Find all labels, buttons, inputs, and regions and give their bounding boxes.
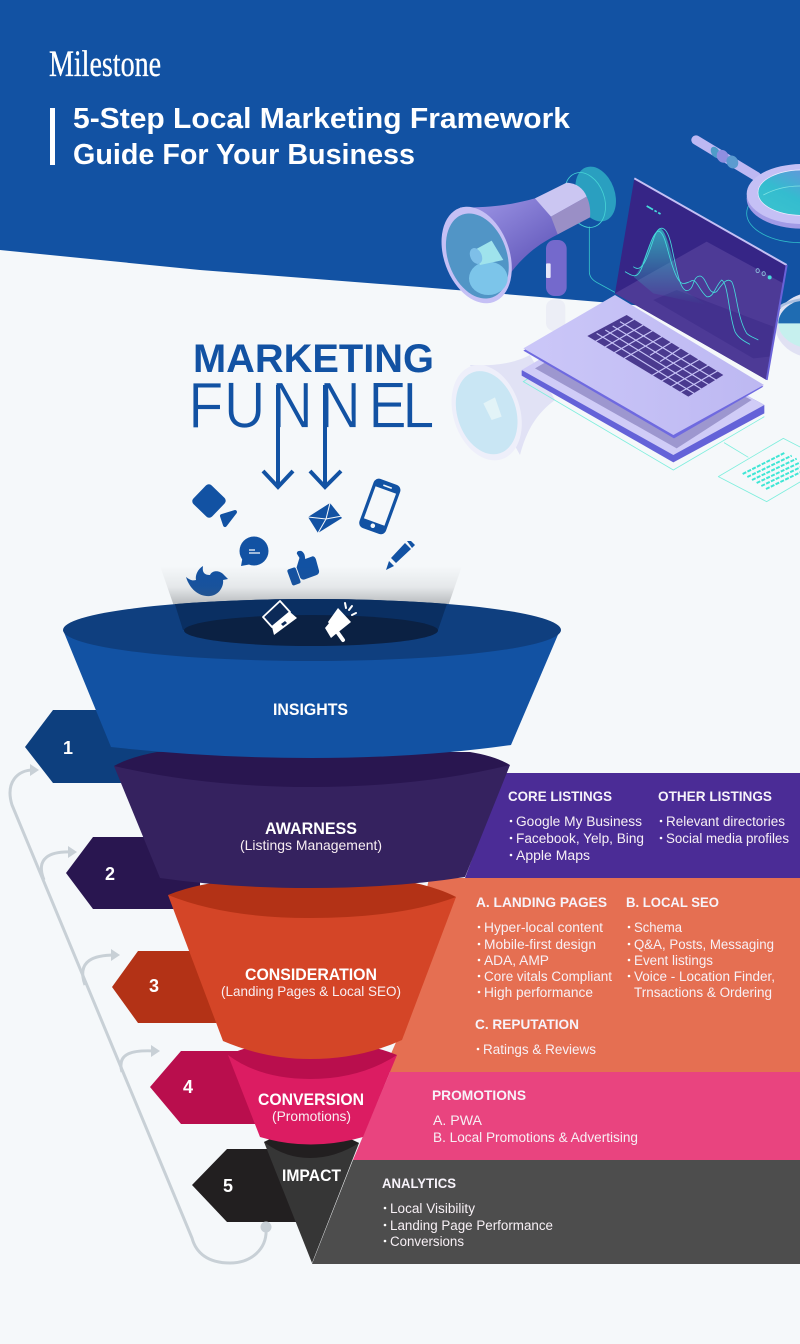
funnel tier 2: awareness [114, 752, 510, 888]
keyboard [587, 315, 723, 397]
step badge 2: 2 [105, 864, 115, 884]
funnel tier 2: awareness: (Listings Management) [240, 837, 382, 853]
data panel [718, 438, 800, 502]
funnel opening shadow [160, 566, 462, 612]
funnel tier 3: consideration: CONSIDERATION [245, 965, 377, 984]
list: promotions: A. PWA [433, 1113, 482, 1128]
heading: reputation: C. REPUTATION [475, 1016, 579, 1032]
list: promotions [433, 1113, 638, 1145]
megaphone reflection [440, 299, 565, 470]
icon: laptop [263, 601, 297, 635]
funnel tier 1: insights [63, 595, 561, 758]
funnel tier 1: insights: INSIGHTS [273, 700, 348, 719]
list: landing pages: Mobile-first design [484, 937, 596, 952]
list: analytics: Local Visibility [390, 1201, 475, 1216]
list: core listings: Google My Business [516, 814, 642, 829]
list: landing pages: Core vitals Compliant [484, 969, 612, 984]
step badge 1 [25, 710, 170, 783]
cable [589, 227, 615, 292]
screen chart [625, 206, 772, 344]
screen [615, 178, 787, 380]
funnel tier 4: conversion [228, 1040, 397, 1144]
step badge 3 [112, 951, 240, 1023]
icon: pencil [386, 541, 415, 570]
heading: other listings: OTHER LISTINGS [658, 788, 772, 804]
title: 5-Step Local Marketing Framework [73, 103, 571, 135]
megaphone [429, 161, 623, 313]
panel: awareness listings [465, 773, 800, 878]
step badge 2 [66, 837, 200, 909]
step badge 3: 3 [149, 976, 159, 996]
teal outline under laptop [523, 377, 764, 470]
panel: analytics [312, 1160, 800, 1264]
title [50, 103, 571, 171]
heading: marketing funnel [188, 337, 434, 441]
step badge 1: 1 [63, 738, 73, 758]
funnel tier 4: conversion: CONVERSION [258, 1090, 364, 1109]
panel: promotions [353, 1072, 800, 1160]
icon: envelope [308, 503, 342, 533]
icon: smartphone [360, 479, 400, 534]
title: Guide For Your Business [73, 139, 415, 171]
list: local seo [628, 920, 775, 1000]
funnel tier 3: consideration: (Landing Pages & Local SEO) [221, 983, 401, 999]
list: analytics [384, 1201, 553, 1249]
list: other listings [660, 814, 789, 846]
arrow: left down arrow [263, 385, 293, 487]
list: core listings [510, 814, 644, 863]
list: analytics: Conversions [390, 1234, 464, 1249]
list: local seo: Event listings [634, 953, 713, 968]
list: promotions: B. Local Promotions & Advertising [433, 1130, 638, 1145]
heading: landing pages: A. LANDING PAGES [476, 894, 607, 910]
list: reputation: Ratings & Reviews [483, 1042, 596, 1057]
list: landing pages: Hyper-local content [484, 920, 603, 935]
flow arrows [10, 764, 271, 1263]
list: landing pages: ADA, AMP [484, 953, 549, 968]
step badge 4: 4 [183, 1077, 193, 1097]
icon: speech bubble [240, 536, 268, 566]
list: local seo: Voice - Location Finder, [634, 969, 775, 984]
icon: video camera [191, 483, 235, 525]
step badge 4 [150, 1051, 270, 1124]
icon: twitter bird [186, 566, 228, 596]
list: local seo: Schema [634, 920, 682, 935]
heading: local seo: B. LOCAL SEO [626, 894, 719, 910]
header band [0, 0, 800, 320]
icon: thumbs up [282, 546, 322, 586]
panel: consideration details [383, 878, 800, 1072]
heading: promotions: PROMOTIONS [432, 1087, 526, 1103]
funnel tier 5: impact [264, 1130, 359, 1263]
funnel tier 4: conversion: (Promotions) [272, 1108, 351, 1124]
list: core listings: Apple Maps [516, 848, 590, 863]
list: landing pages [478, 920, 612, 1000]
funnel tier 3: consideration [168, 880, 456, 1059]
illustration: megaphone, laptop and magnifier [429, 140, 800, 502]
icon: megaphone [325, 603, 356, 640]
step badge 5 [192, 1149, 300, 1222]
list: other listings: Relevant directories [666, 814, 785, 829]
funnel tier 5: impact: IMPACT [282, 1166, 342, 1185]
heading: marketing funnel: FUNNEL [188, 369, 434, 441]
list: landing pages: High performance [484, 985, 593, 1000]
logo: Milestone [49, 44, 161, 85]
heading: analytics: ANALYTICS [382, 1175, 456, 1191]
arrow: right down arrow [310, 385, 341, 487]
list: core listings: Facebook, Yelp, Bing [516, 831, 644, 846]
list: other listings: Social media profiles [666, 831, 789, 846]
step badge 5: 5 [223, 1176, 233, 1196]
list: local seo: Trnsactions & Ordering [634, 985, 772, 1000]
funnel tier 2: awareness: AWARNESS [265, 819, 357, 838]
list: local seo: Q&A, Posts, Messaging [634, 937, 774, 952]
heading: marketing funnel: MARKETING [193, 337, 434, 381]
heading: core listings: CORE LISTINGS [508, 788, 612, 804]
icon: magnifier [696, 140, 800, 243]
laptop [522, 178, 787, 462]
list: analytics: Landing Page Performance [390, 1218, 553, 1233]
magnifier reflection [775, 292, 800, 358]
